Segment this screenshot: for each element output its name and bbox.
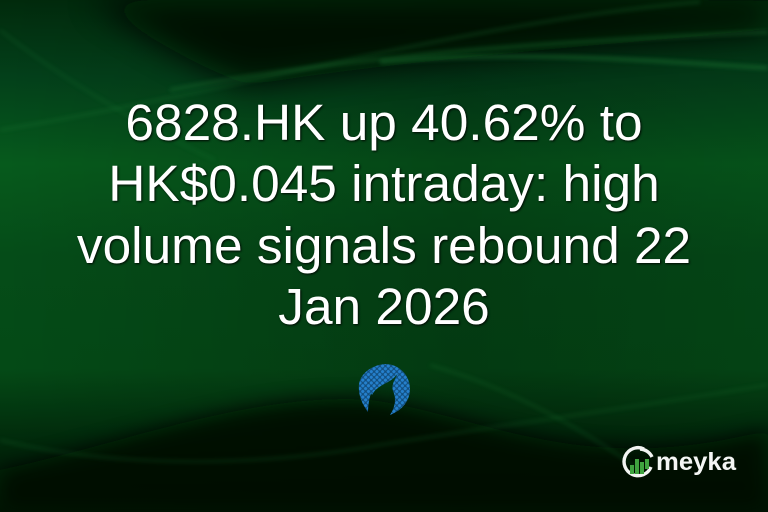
- title: HK$0.045 intraday: high: [108, 154, 660, 212]
- icon: ring with bars: [624, 448, 652, 476]
- title: volume signals rebound 22: [77, 216, 691, 274]
- title: 6828.HK up 40.62% to: [125, 93, 643, 151]
- logo: blue halftone flame globe: [359, 364, 410, 415]
- title: [77, 93, 691, 335]
- brand logo: meyka: [622, 446, 737, 478]
- title: Jan 2026: [278, 277, 490, 335]
- wordmark: meyka: [656, 448, 737, 476]
